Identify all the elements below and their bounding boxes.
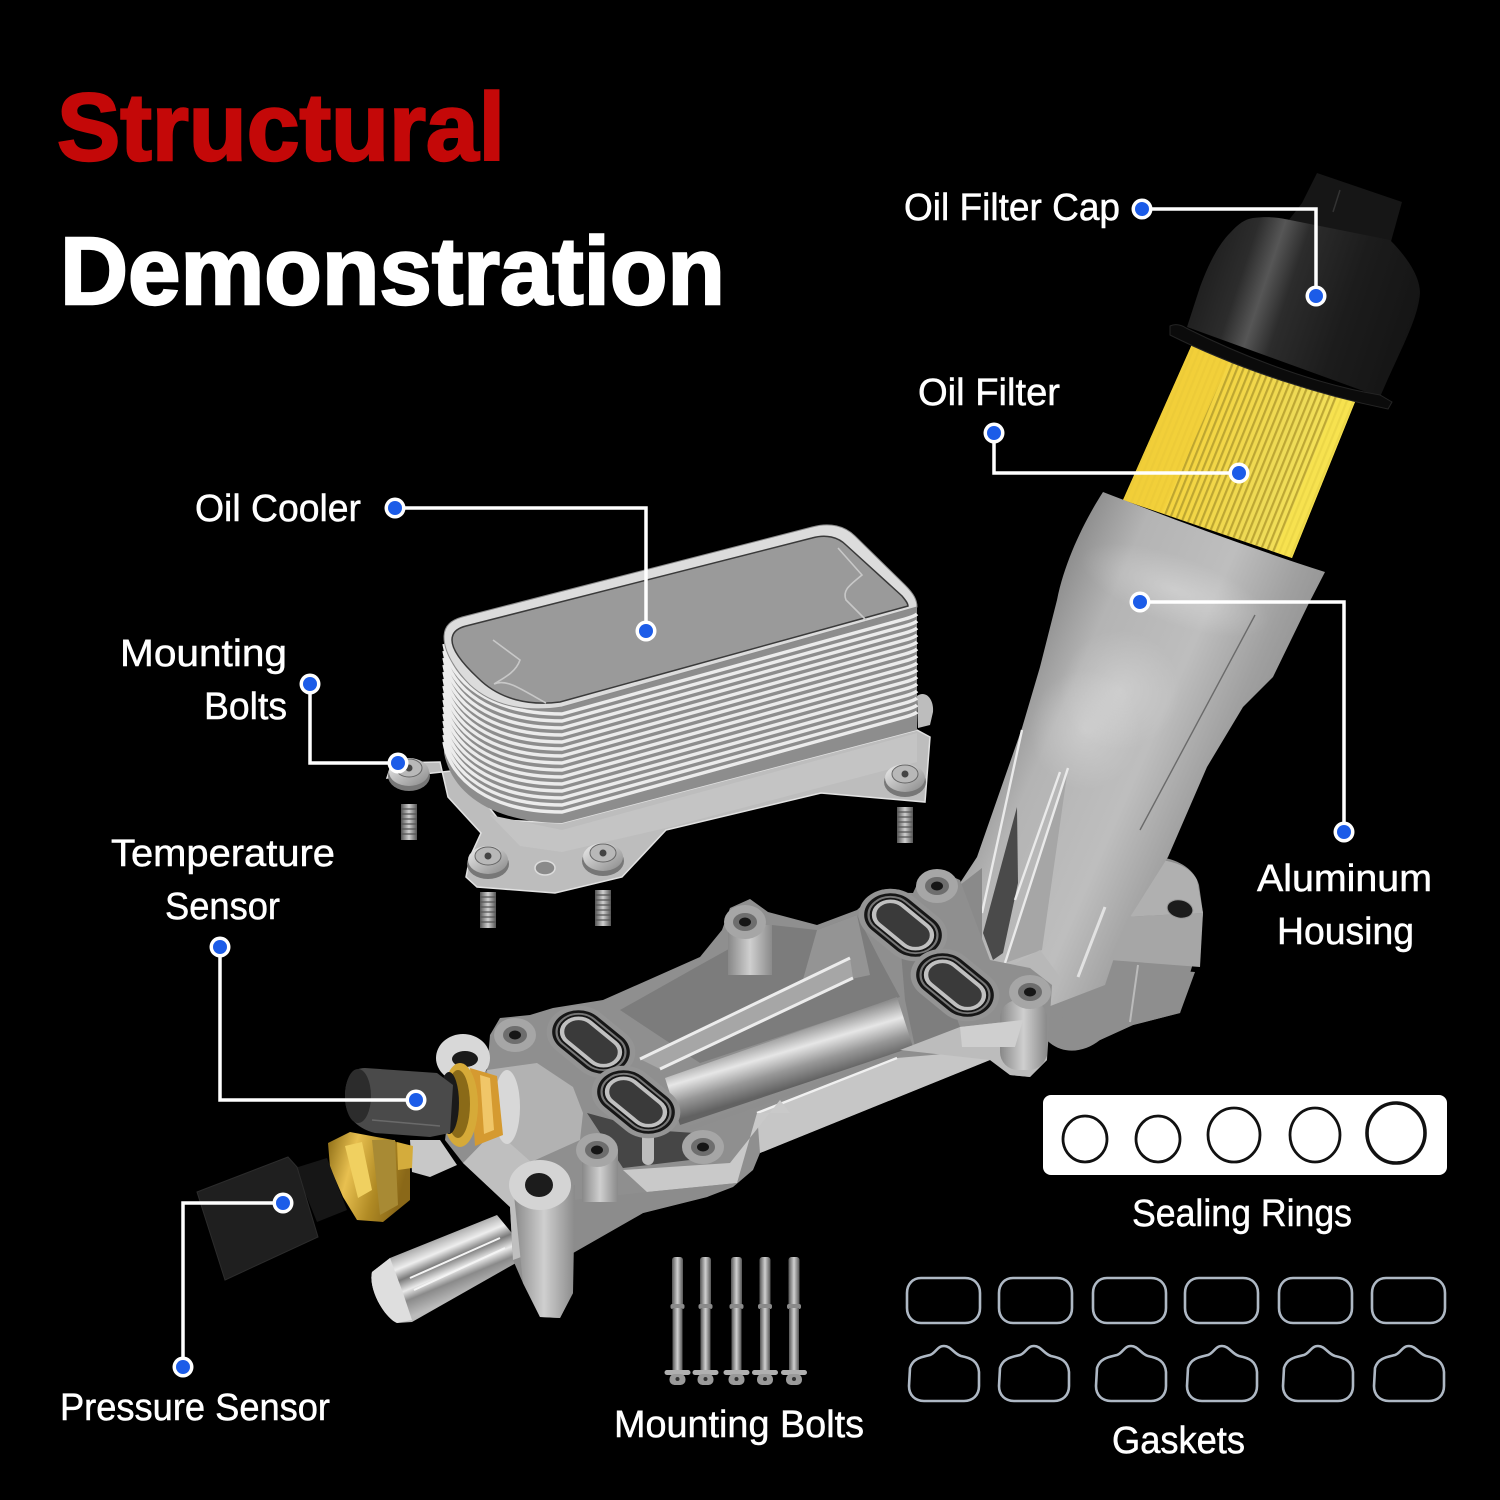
oil cooler (387, 525, 933, 928)
callout: aluminum housing: Housing (1277, 911, 1414, 953)
callout: oil filter cap: Oil Filter Cap (904, 187, 1120, 229)
manifold bolt lugs (494, 1018, 536, 1052)
aluminum housing (960, 492, 1325, 1010)
manifold gaskets (845, 878, 961, 972)
title: Structural (57, 74, 505, 181)
cooler base plate (387, 730, 930, 893)
callout: oil filter (918, 372, 1250, 484)
label: gaskets: Gaskets (1112, 1420, 1245, 1462)
title: Demonstration (60, 218, 725, 325)
callout: oil filter: Oil Filter (918, 372, 1060, 414)
gaskets set (907, 1278, 1445, 1401)
callout: oil cooler: Oil Cooler (195, 488, 361, 530)
label: sealing rings: Sealing Rings (1132, 1193, 1352, 1235)
housing ribs (983, 807, 1018, 960)
callout: pressure sensor (60, 1192, 330, 1429)
manifold central cylinder (665, 997, 913, 1125)
callout: cooler mounting bolts (120, 633, 408, 774)
oil filter element (1123, 342, 1357, 558)
cooler top plate (444, 525, 917, 709)
manifold body (445, 870, 1052, 1318)
oil filter cap (1170, 173, 1420, 409)
aluminum manifold (371, 869, 1052, 1323)
housing rear block (1000, 857, 1203, 1051)
callout: cooler mounting bolts: Bolts (204, 686, 287, 728)
mounting bolts set (664, 1257, 807, 1385)
callout: temperature sensor: Sensor (165, 886, 280, 928)
label: mounting bolts: Mounting Bolts (614, 1404, 864, 1446)
manifold post (513, 1185, 575, 1318)
callout: temperature sensor: Temperature (111, 833, 335, 875)
callout: cooler mounting bolts: Mounting (120, 633, 287, 675)
manifold flange (587, 1113, 695, 1168)
manifold left block (487, 1063, 583, 1170)
title (57, 74, 725, 325)
coolant pipe (371, 1215, 530, 1323)
callout: aluminum housing (1130, 592, 1432, 953)
sealing rings panel (1043, 1095, 1447, 1175)
cooler screws and studs (401, 804, 417, 840)
pressure sensor (197, 1132, 457, 1280)
cooler fin stack (444, 607, 917, 823)
callout: aluminum housing: Aluminum (1257, 858, 1432, 900)
temperature sensor (345, 1063, 520, 1147)
callout: pressure sensor: Pressure Sensor (60, 1387, 330, 1429)
callout: oil filter cap (904, 187, 1326, 306)
callout: oil cooler (195, 488, 656, 642)
callout: temperature sensor (111, 833, 426, 1110)
